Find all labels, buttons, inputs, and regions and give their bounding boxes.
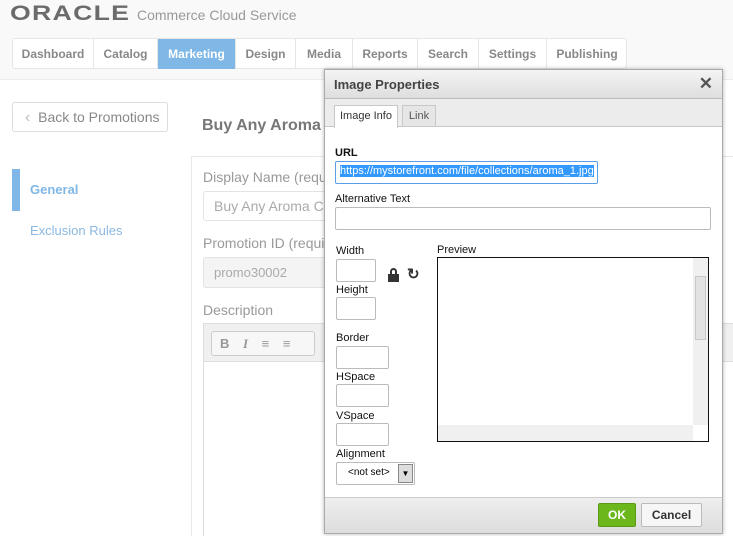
dialog: image properties: Alignment [336,448,385,460]
nav tabs: Design [245,47,286,61]
side nav: General [30,182,78,197]
back button [12,102,168,132]
page title: Buy Any Aroma [202,117,321,134]
Cancel button: Cancel [652,508,691,522]
alt text field: Alternative Text [335,193,410,205]
nav tabs: Dashboard [22,47,84,61]
product name: Commerce Cloud Service [137,7,296,23]
logo: ORACLE [10,2,130,25]
dialog: image properties: https://mystorefront.com/file/collections/aroma_1.jpg [340,165,594,177]
form panel: Buy Any Aroma Collection [214,198,375,214]
dialog footer [325,497,722,533]
dialog title bar: ✕ [699,74,713,93]
icon: lock and reset: ↻ [407,266,420,283]
preview box: Preview [437,244,476,256]
icon: lock and reset [388,266,420,283]
dialog tabs [325,99,722,127]
dialog: image properties [324,69,723,534]
OK button [598,503,636,527]
side nav: Exclusion Rules [30,223,122,238]
form panel: B I ≡ ≡ [220,336,290,351]
dialog: image properties: HSpace [336,371,375,383]
nav tabs: Settings [489,47,536,61]
nav tabs: Catalog [103,47,148,61]
dialog tabs: Link [409,110,429,122]
form panel: Display Name (required) [203,169,355,185]
form panel: Promotion ID (required) [203,235,349,251]
dialog: image properties: Border [336,332,369,344]
nav tabs: Search [428,47,468,61]
back button: ‹ Back to Promotions [25,109,160,126]
OK button: OK [608,508,626,522]
nav tabs: Marketing [168,47,225,61]
alignment select [336,462,415,485]
side nav [12,169,122,238]
nav tabs: Media [307,47,341,61]
alignment select: <not set> [348,467,390,478]
alignment select: ▼ [402,469,409,478]
form panel: Description [203,302,273,318]
nav tabs: Reports [362,47,408,61]
dialog tabs: Image Info [340,110,392,122]
nav tabs [12,38,627,69]
nav tabs: Publishing [556,47,618,61]
dialog title bar: Image Properties [334,77,440,92]
dialog: image properties: Height [336,284,368,296]
header band [0,0,733,80]
Cancel button [641,503,702,527]
URL field: URL [335,147,358,159]
dialog title bar [325,70,722,99]
dialog: image properties: VSpace [336,410,375,422]
form panel [191,156,733,536]
form panel: promo30002 [214,265,287,280]
dimension fields: Width [336,245,364,257]
